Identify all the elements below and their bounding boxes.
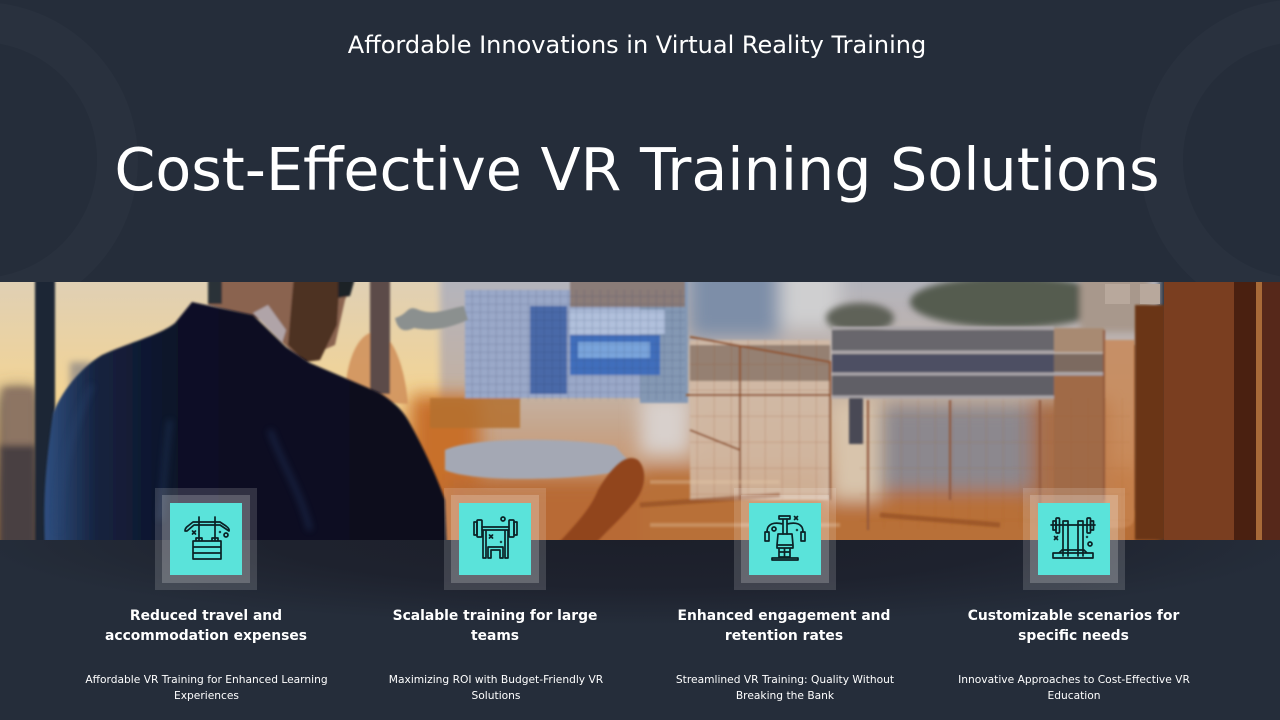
right wall: [1135, 305, 1165, 540]
benefit 4 description: Innovative Approaches to Cost-Effective VR Education: [958, 672, 1190, 702]
subtitle: Affordable Innovations in Virtual Reality Training: [348, 31, 926, 59]
benefit 2 heading: Scalable training for large teams: [393, 608, 597, 644]
title: Cost-Effective VR Training Solutions: [114, 136, 1160, 204]
icon tile 3: gym station: [734, 488, 836, 590]
benefit 3 heading: Enhanced engagement and retention rates: [678, 608, 890, 644]
left city skyline: [0, 362, 92, 560]
blurred colour areas: [0, 262, 1140, 560]
benefit 1 description: Affordable VR Training for Enhanced Learning Experiences: [85, 672, 328, 702]
icon tile 1: lat pulldown machine: [155, 488, 257, 590]
wireframe base: [440, 262, 1160, 560]
window frames: [35, 275, 408, 550]
background decorative circles: [0, 0, 1280, 282]
icon tile 4: squat rack: [1023, 488, 1125, 590]
hero photo: man viewing holographic building: [0, 282, 1280, 546]
benefit 2 description: Maximizing ROI with Budget-Friendly VR Solutions: [389, 672, 603, 702]
benefit 4 heading: Customizable scenarios for specific needs: [968, 608, 1179, 644]
icon tile 2: bench press: [444, 488, 546, 590]
man: head and neck: [208, 275, 356, 362]
man: dark shirt: [44, 302, 447, 550]
benefit 1 heading: Reduced travel and accommodation expenses: [105, 608, 307, 644]
man: hand: [552, 458, 644, 550]
benefit 3 description: Streamlined VR Training: Quality Without Breaking the Bank: [676, 672, 894, 702]
window sky: [0, 282, 470, 540]
bottom panel shade: [250, 540, 1030, 598]
front building wireframes: [640, 328, 1135, 530]
blue building: [395, 278, 688, 479]
distant trees: [826, 262, 1150, 333]
